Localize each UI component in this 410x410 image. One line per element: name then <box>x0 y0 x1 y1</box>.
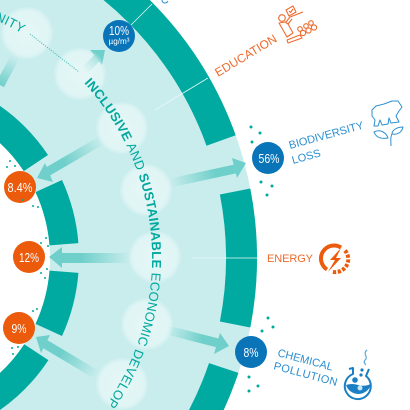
connector lines <box>131 4 257 258</box>
outer ring segments <box>104 0 257 410</box>
stat: 8 percent: 8% <box>244 345 259 360</box>
stat: 9 percent: 9% <box>12 321 27 336</box>
icon: flask <box>345 350 371 399</box>
stat: 12 percent <box>13 241 45 273</box>
icon: energy bolt <box>321 245 348 272</box>
icon: bear and plant <box>372 101 403 146</box>
stat: 8.4 percent: 8.4% <box>8 180 33 195</box>
stat: 12 percent: 12% <box>19 250 39 265</box>
label: chemical pollution: CHEMICAL <box>276 347 334 374</box>
stat: 10 percent: 10% <box>109 24 129 38</box>
light ring band <box>0 0 257 410</box>
stat: 56 percent <box>252 142 284 174</box>
label: biodiversity loss: LOSS <box>291 147 322 167</box>
inner ring segments <box>0 106 78 410</box>
glow circles along path <box>1 7 181 410</box>
label: chemical pollution: POLLUTION <box>272 360 339 389</box>
stat: 56 percent: 56% <box>258 151 280 166</box>
label: energy: ENERGY <box>267 253 314 265</box>
label: biodiversity loss <box>288 120 366 167</box>
label: education: EDUCATION <box>212 32 279 80</box>
stat: 9 percent <box>3 312 35 344</box>
arrows <box>0 50 246 375</box>
curved text: inclusive and sustainable economic development: INCLUSIVE AND SUSTAINABLE ECONOMIC DEVELOP <box>84 78 162 408</box>
stat: 10 percent <box>103 20 135 52</box>
stat: 10 percent: µg/m³ <box>108 36 130 46</box>
dotted path <box>30 34 79 72</box>
stat: 8 percent <box>235 336 267 368</box>
label: chemical pollution <box>272 347 339 389</box>
label: biodiversity loss: BIODIVERSITY <box>288 120 366 152</box>
icon: teacher with students <box>279 6 317 43</box>
stat: 8.4 percent <box>4 171 36 203</box>
clipped top label fragment <box>162 0 168 3</box>
scattered dots <box>6 126 274 392</box>
